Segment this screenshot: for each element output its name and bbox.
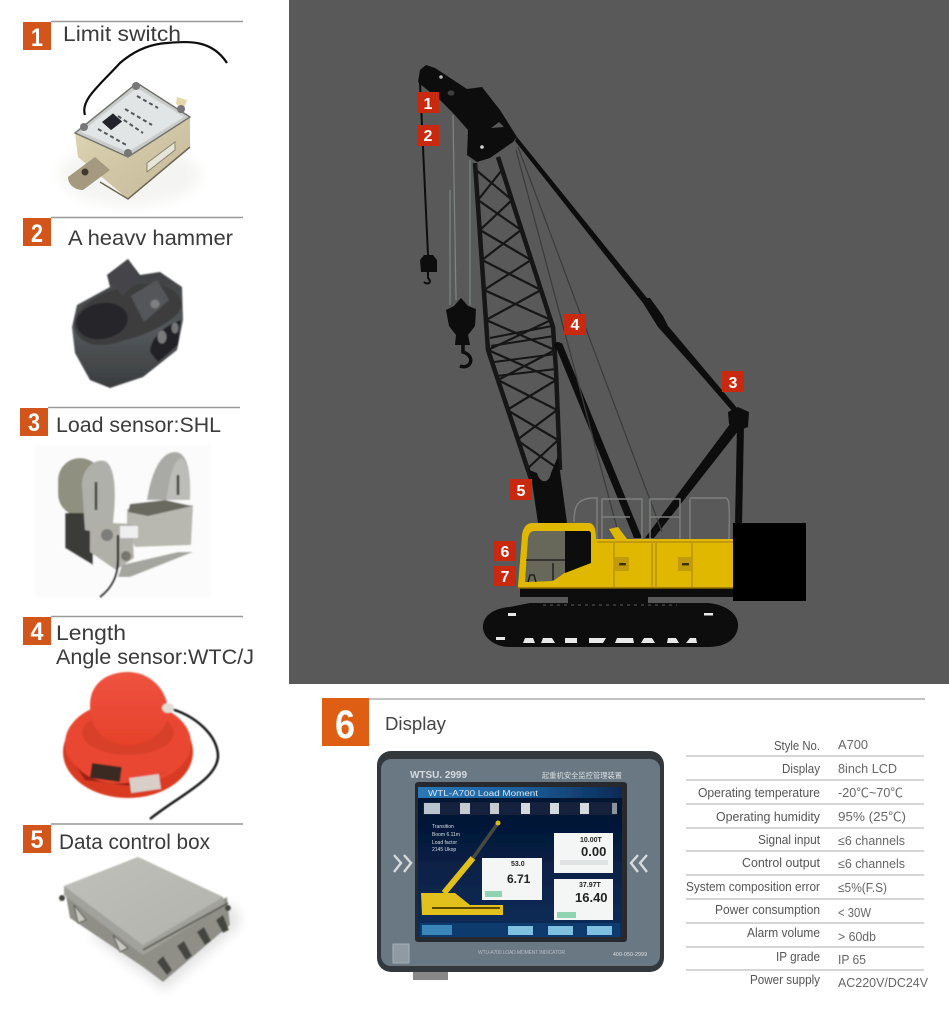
- marker 6: 6: [501, 544, 510, 561]
- screen notes: [432, 824, 460, 853]
- panel: load sensor: [20, 408, 240, 597]
- marker 1: 1: [424, 96, 433, 113]
- reading card: 16.40: 16.40: [575, 890, 608, 905]
- badge 3: [20, 408, 48, 437]
- marker 5: 5: [517, 483, 526, 500]
- marker 2: [417, 125, 439, 146]
- row: temperature: [698, 786, 903, 800]
- row: control output: Control output: [742, 856, 821, 870]
- reading card: 16.40: 37.97T: [579, 882, 602, 889]
- row: style no: Style No.: [774, 739, 820, 753]
- row: style no: [774, 738, 868, 753]
- badge 6: [322, 698, 369, 747]
- reading card: 16.40: [554, 879, 613, 920]
- cab window left: [525, 531, 566, 582]
- screen title: WTL-A700 Load Moment: [428, 789, 539, 798]
- screen: [415, 782, 627, 942]
- heading: length: Length: [56, 622, 126, 645]
- row: power supply: [750, 973, 929, 990]
- reading card: 0.00: 0.00: [581, 844, 606, 859]
- boom lattice: [475, 157, 560, 482]
- marker 4: [564, 314, 586, 335]
- row: humidity: 95% (25℃): [838, 810, 906, 824]
- badge 4: [23, 617, 51, 646]
- mini crane: [421, 820, 503, 915]
- marker 1: [417, 92, 439, 113]
- boom top head: [418, 65, 517, 162]
- row: style no: A700: [838, 738, 868, 752]
- chevrons right: [631, 855, 647, 872]
- boom base: [529, 456, 567, 523]
- row: control output: ≤6 channels: [838, 857, 905, 871]
- marker 2: 2: [424, 128, 433, 145]
- row: temperature: -20℃~70℃: [838, 786, 903, 800]
- heading: angle sensor: Angle sensor:WTC/J: [56, 646, 254, 669]
- screen notes: Load factor: [432, 840, 457, 846]
- marker 7: 7: [501, 569, 510, 586]
- heading: load sensor: Load sensor:SHL: [56, 414, 221, 437]
- screen notes: Boom 6.11m: [432, 832, 460, 838]
- screen bottom bar: [420, 923, 620, 937]
- row: display: [782, 762, 897, 776]
- reading card: 6.71: 6.71: [507, 872, 531, 886]
- row: display: 8inch LCD: [838, 762, 897, 776]
- heading: limit switch: Limit switch: [63, 23, 181, 46]
- row: ip grade: [776, 950, 866, 967]
- screen notes: Transition: [432, 824, 454, 830]
- icon: hammer weight: [72, 259, 183, 388]
- badge 6: 6: [335, 703, 355, 747]
- heading: display: Display: [385, 714, 446, 734]
- undercarriage: [520, 588, 805, 597]
- device footer icon: [393, 944, 409, 963]
- badge 4: 4: [30, 618, 44, 646]
- icon: red angle sensor: [63, 672, 218, 819]
- badge 2: 2: [31, 220, 43, 248]
- row: alarm volume: [747, 926, 876, 944]
- row: power consumption: < 30W: [838, 906, 871, 920]
- row: signal input: Signal input: [758, 833, 820, 847]
- marker 6: [494, 541, 516, 561]
- marker 7: [494, 566, 516, 586]
- badge 5: [23, 825, 51, 854]
- row: display: Display: [782, 762, 821, 776]
- row: ip grade: IP 65: [838, 953, 866, 967]
- marker 4: 4: [571, 317, 580, 334]
- crawler track: [483, 596, 738, 647]
- marker 3: 3: [729, 375, 738, 392]
- row: signal input: [758, 833, 905, 848]
- row: power supply: Power supply: [750, 973, 821, 987]
- panel: length angle sensor: [23, 616, 254, 819]
- badge 2: [23, 218, 51, 248]
- marker 5: [510, 479, 532, 500]
- badge 1: [23, 22, 51, 52]
- row: signal input: ≤6 channels: [838, 834, 905, 848]
- hook two: [446, 115, 476, 367]
- reading card: 6.71: 53.0: [511, 861, 525, 868]
- heading: data control box: Data control box: [59, 831, 210, 854]
- icon: load sensor: [35, 445, 211, 597]
- specification table: [686, 738, 929, 990]
- icon toolbar: [423, 802, 617, 815]
- cab and body: [518, 523, 733, 588]
- row: temperature: Operating temperature: [698, 786, 820, 800]
- panel: limit switch: [23, 22, 243, 205]
- row: composition error: System composition error: [686, 880, 820, 894]
- hook one: [420, 83, 437, 283]
- row: ip grade: IP grade: [776, 950, 820, 964]
- screen notes: 2145 Ukop: [432, 847, 456, 853]
- icon: limit switch device: [60, 42, 227, 205]
- pendant: [735, 425, 744, 525]
- panel: data control box: [23, 824, 243, 990]
- back stay: [515, 137, 737, 412]
- product title: 起重机安全监控管理装置: [542, 771, 622, 780]
- device: A700 monitor: [377, 751, 664, 980]
- counterweight: [733, 523, 806, 601]
- reading card: 6.71: [482, 858, 542, 900]
- row: control output: [742, 856, 905, 871]
- reading card: 0.00: 10.00T: [580, 837, 603, 844]
- chevrons left: [394, 855, 411, 872]
- cab window right: [565, 531, 591, 573]
- badge 1: 1: [31, 24, 43, 52]
- heading: hammer: A heavv hammer: [68, 227, 233, 250]
- body door panels: [597, 541, 733, 587]
- row: power supply: AC220V/DC24V: [838, 976, 929, 990]
- reading card: 0.00: [554, 833, 613, 873]
- row: power consumption: Power consumption: [715, 903, 820, 917]
- mast: [645, 420, 742, 538]
- row: power consumption: [715, 903, 871, 920]
- panel: display section: [322, 698, 929, 990]
- row: humidity: Operating humidity: [716, 810, 821, 824]
- row: alarm volume: Alarm volume: [747, 926, 820, 940]
- panel: crane diagram background: [289, 0, 949, 684]
- badge 3: 3: [28, 409, 40, 437]
- boom strut: [555, 343, 642, 538]
- badge 5: 5: [30, 826, 44, 854]
- row: composition error: [686, 880, 887, 895]
- mast head: [728, 407, 749, 431]
- row: alarm volume: > 60db: [838, 930, 876, 944]
- crane illustration: [418, 65, 806, 647]
- marker 3: [722, 371, 744, 392]
- brand text: WTSU. 2999: [410, 770, 467, 781]
- device footer text: WTU-A700 LOAD MOMENT INDICATOR: [478, 950, 565, 956]
- icon: junction box: [59, 857, 240, 990]
- thin cables: [516, 147, 662, 532]
- row: humidity: [716, 810, 906, 824]
- railings: [574, 498, 729, 539]
- device footer model: 400-050-2999: [613, 952, 647, 958]
- row: composition error: ≤5%(F.S): [838, 881, 887, 895]
- panel: heavy hammer: [23, 218, 243, 388]
